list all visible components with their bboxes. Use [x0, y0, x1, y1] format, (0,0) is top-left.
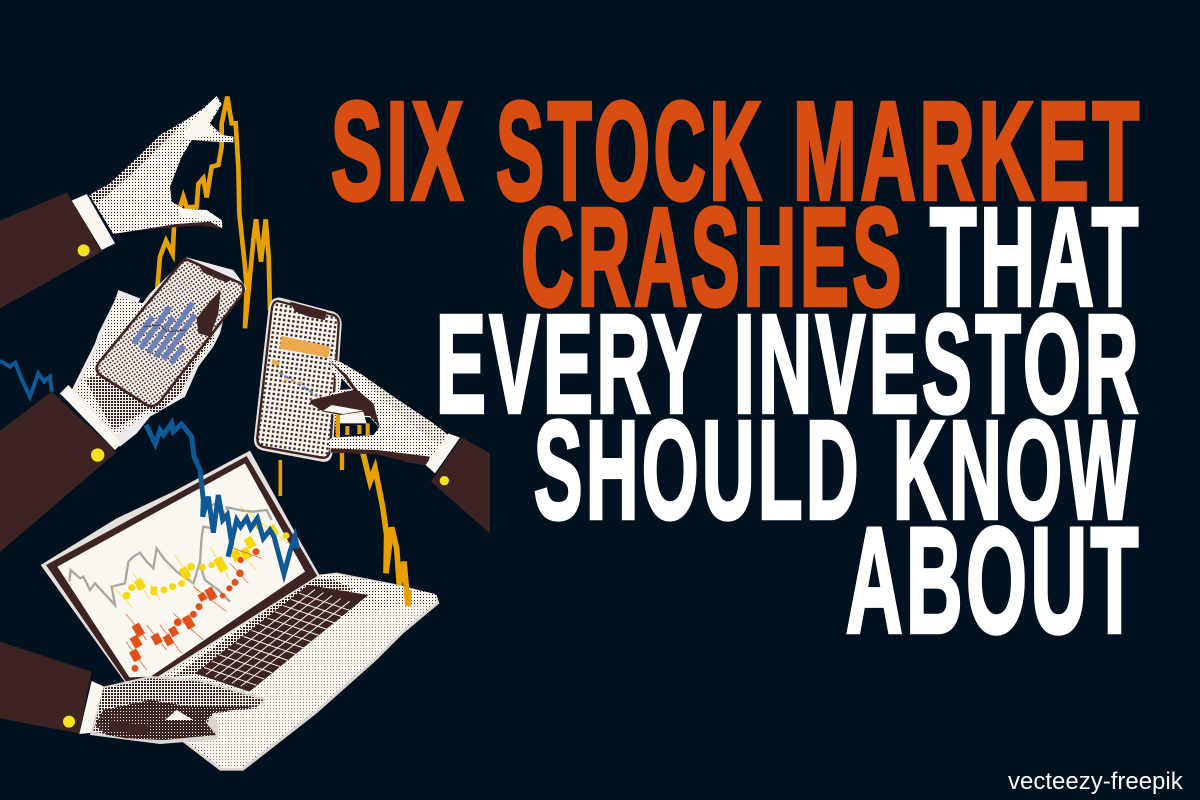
orange line: rise and peak — [157, 97, 270, 328]
title line 1 — [331, 73, 1143, 229]
yellow candlesticks — [112, 507, 293, 607]
gray line chart — [69, 503, 272, 605]
title line 3: EVERY — [436, 286, 705, 442]
phone, right — [254, 297, 342, 462]
laptop screen — [41, 451, 320, 687]
sleeve and button — [431, 437, 490, 533]
blue line: left fragment — [0, 361, 52, 397]
hand: typing on laptop — [90, 676, 266, 744]
title line 1: SIX — [331, 73, 467, 229]
cuff — [426, 433, 460, 473]
bar chart on phone — [134, 303, 195, 363]
arm: lower left sleeve — [0, 642, 104, 734]
title — [331, 73, 1143, 664]
orange banner and points on phone — [271, 336, 330, 395]
title line 1: STOCK — [496, 73, 765, 229]
title line 4: SHOULD — [534, 392, 862, 548]
laptop base with keyboard — [133, 573, 439, 771]
hand pointing at phone, right, with arm — [310, 358, 490, 533]
collage illustration: upper scene — [0, 96, 342, 552]
arm and pinching hand — [0, 96, 233, 308]
orange line: lower fall — [280, 450, 409, 606]
hand holding phone, left — [60, 257, 247, 447]
collage illustration: lower scene — [0, 423, 439, 771]
image credit: vecteezy-freepik — [1008, 768, 1184, 795]
orange candlesticks — [126, 548, 262, 672]
keyboard — [195, 585, 368, 692]
blue falling line over laptop — [146, 423, 297, 574]
arm, middle left — [0, 385, 122, 552]
phone, left — [97, 260, 244, 406]
hand — [310, 358, 448, 465]
